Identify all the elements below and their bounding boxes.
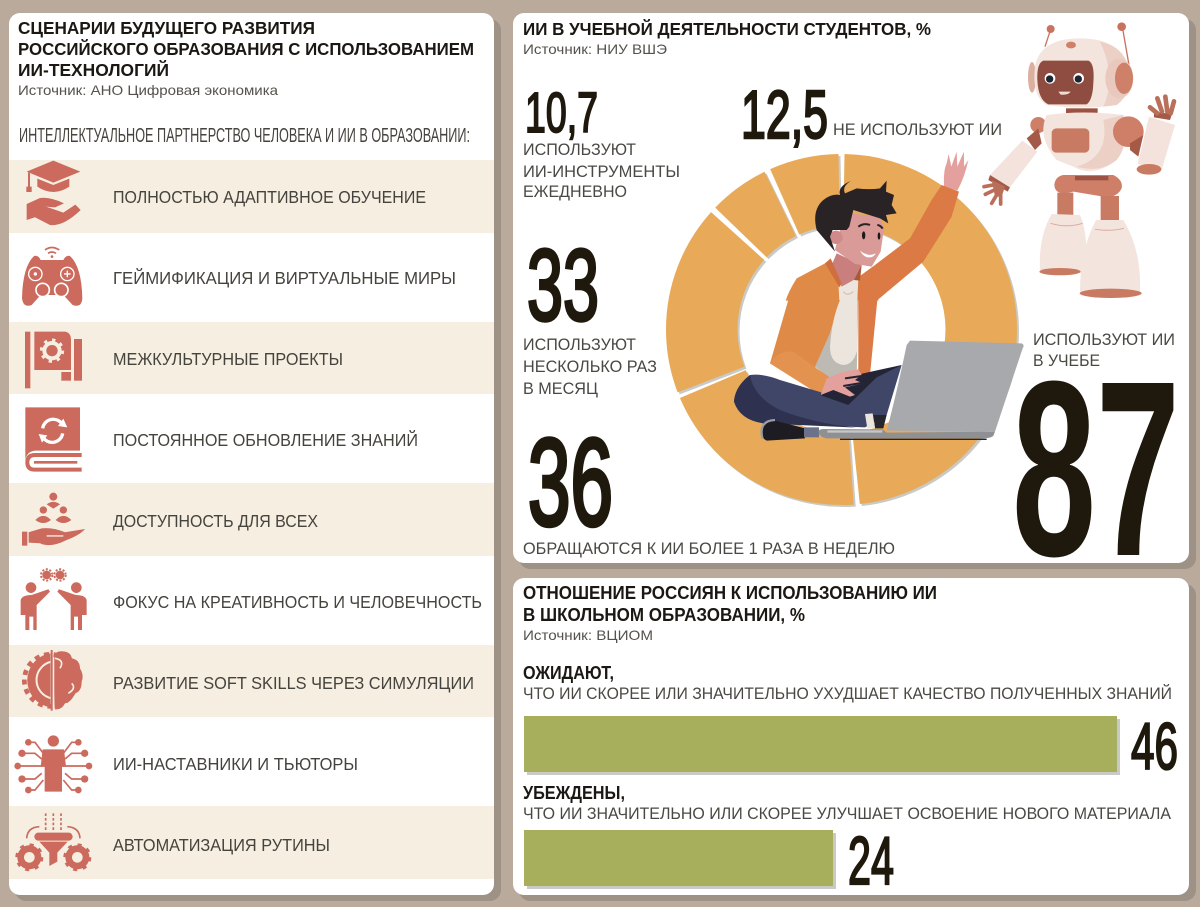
row: creativity focus [21,569,482,630]
heading: scenarios [18,18,474,80]
panel: scenarios [9,13,494,895]
icon: book with arrows [25,407,82,470]
row: routine automation: АВТОМАТИЗАЦИЯ РУТИНЫ [113,835,330,855]
illustration: student with laptop [734,152,1024,441]
stat: 33 monthly: В МЕСЯЦ [523,380,598,398]
row: gamification [22,247,456,306]
bar chart: expect [523,663,1178,783]
stat: 12,5 do not use: 12,5 [741,77,828,153]
stat: 12,5 do not use: НЕ ИСПОЛЬЗУЮТ ИИ [833,121,1002,139]
illustration: robot [984,22,1175,298]
icon: banner with gear [25,332,82,388]
heading: AI in learning: ИИ В УЧЕБНОЙ ДЕЯТЕЛЬНОСТИ СТУДЕНТОВ, % [523,18,931,39]
row: gamification: ГЕЙМИФИКАЦИЯ И ВИРТУАЛЬНЫЕ МИРЫ [113,267,456,288]
stat: 36 weekly: 36 [528,415,613,552]
stat: 10,7 daily: ИИ-ИНСТРУМЕНТЫ [523,163,680,181]
stat: 10,7 daily: ЕЖЕДНЕВНО [523,183,627,201]
row: intercultural projects: МЕЖКУЛЬТУРНЫЕ ПРОЕКТЫ [113,349,343,369]
panel: attitudes to AI in schools [513,578,1189,899]
stat: 36 weekly [523,415,895,558]
subheading: partnership: ИНТЕЛЛЕКТУАЛЬНОЕ ПАРТНЕРСТВО ЧЕЛОВЕКА И ИИ В ОБРАЗОВАНИИ: [19,124,470,147]
stat: 10,7 daily: ИСПОЛЬЗУЮТ [523,141,636,159]
bar chart: expect: ОЖИДАЮТ, [523,663,614,683]
row: accessibility [22,493,318,546]
bar chart: convinced: ЧТО ИИ ЗНАЧИТЕЛЬНО ИЛИ СКОРЕЕ УЛУЧШАЕТ ОСВОЕНИЕ НОВОГО МАТЕРИАЛА [523,805,1171,823]
source: HSE: Источник: НИУ ВШЭ [523,41,667,57]
bar chart: expect: ЧТО ИИ СКОРЕЕ ИЛИ ЗНАЧИТЕЛЬНО УХУДШАЕТ КАЧЕСТВО ПОЛУЧЕННЫХ ЗНАНИЙ [523,684,1172,703]
stat: 36 weekly: ОБРАЩАЮТСЯ К ИИ БОЛЕЕ 1 РАЗА В НЕДЕЛЮ [523,540,895,558]
icon: graduation cap on hand [26,161,81,225]
row: soft skills [24,650,474,711]
bar chart: convinced [523,783,1171,899]
bar chart: convinced: УБЕЖДЕНЫ, [523,783,625,803]
row: adaptive learning: ПОЛНОСТЬЮ АДАПТИВНОЕ ОБУЧЕНИЕ [113,187,426,207]
row: accessibility: ДОСТУПНОСТЬ ДЛЯ ВСЕХ [113,511,318,531]
heading: attitudes: В ШКОЛЬНОМ ОБРАЗОВАНИИ, % [523,605,805,625]
heading: scenarios: ИИ-ТЕХНОЛОГИЙ [18,59,169,80]
icon: gamepad [22,247,82,306]
row: creativity focus: ФОКУС НА КРЕАТИВНОСТЬ И ЧЕЛОВЕЧНОСТЬ [113,592,482,612]
heading: scenarios: РОССИЙСКОГО ОБРАЗОВАНИЯ С ИСПОЛЬЗОВАНИЕМ [18,38,474,59]
icon: gear and brain [24,650,83,711]
row: AI mentors: ИИ-НАСТАВНИКИ И ТЬЮТОРЫ [113,754,358,774]
stat: 12,5 do not use [741,77,1002,153]
row: knowledge updates [25,407,418,470]
stat: 33 monthly [523,230,657,398]
row: AI mentors [14,735,358,793]
stat: 87 use AI in study: В УЧЕБЕ [1033,352,1100,370]
row: intercultural projects [25,332,343,388]
source: VCIOM: Источник: ВЦИОМ [523,627,653,643]
icon: funnel and gears [17,813,90,870]
panel: AI in student learning [513,13,1189,608]
icon: hand holding people [22,493,85,546]
row: soft skills: РАЗВИТИЕ SOFT SKILLS ЧЕРЕЗ СИМУЛЯЦИИ [113,673,474,693]
source: scenarios: Источник: АНО Цифровая экономика [18,82,278,98]
heading: scenarios: СЦЕНАРИИ БУДУЩЕГО РАЗВИТИЯ [18,18,315,38]
bar chart: convinced: 24 [848,823,894,899]
row: knowledge updates: ПОСТОЯННОЕ ОБНОВЛЕНИЕ ЗНАНИЙ [113,429,418,450]
heading: attitudes: ОТНОШЕНИЕ РОССИЯН К ИСПОЛЬЗОВАНИЮ ИИ [523,583,937,603]
icon: two people with gears [21,569,87,630]
icon: person with circuits [14,735,92,793]
row: adaptive learning [26,161,426,225]
stat: 33 monthly: 33 [527,230,599,342]
heading: attitudes [523,583,937,625]
stat: 10,7 daily [523,81,680,201]
stat: 33 monthly: ИСПОЛЬЗУЮТ [523,336,636,354]
stat: 10,7 daily: 10,7 [525,81,598,145]
stat: 87 use AI in study: ИСПОЛЬЗУЮТ ИИ [1033,331,1175,349]
row: routine automation [17,813,330,870]
donut chart [702,190,983,471]
stat: 33 monthly: НЕСКОЛЬКО РАЗ [523,358,657,376]
